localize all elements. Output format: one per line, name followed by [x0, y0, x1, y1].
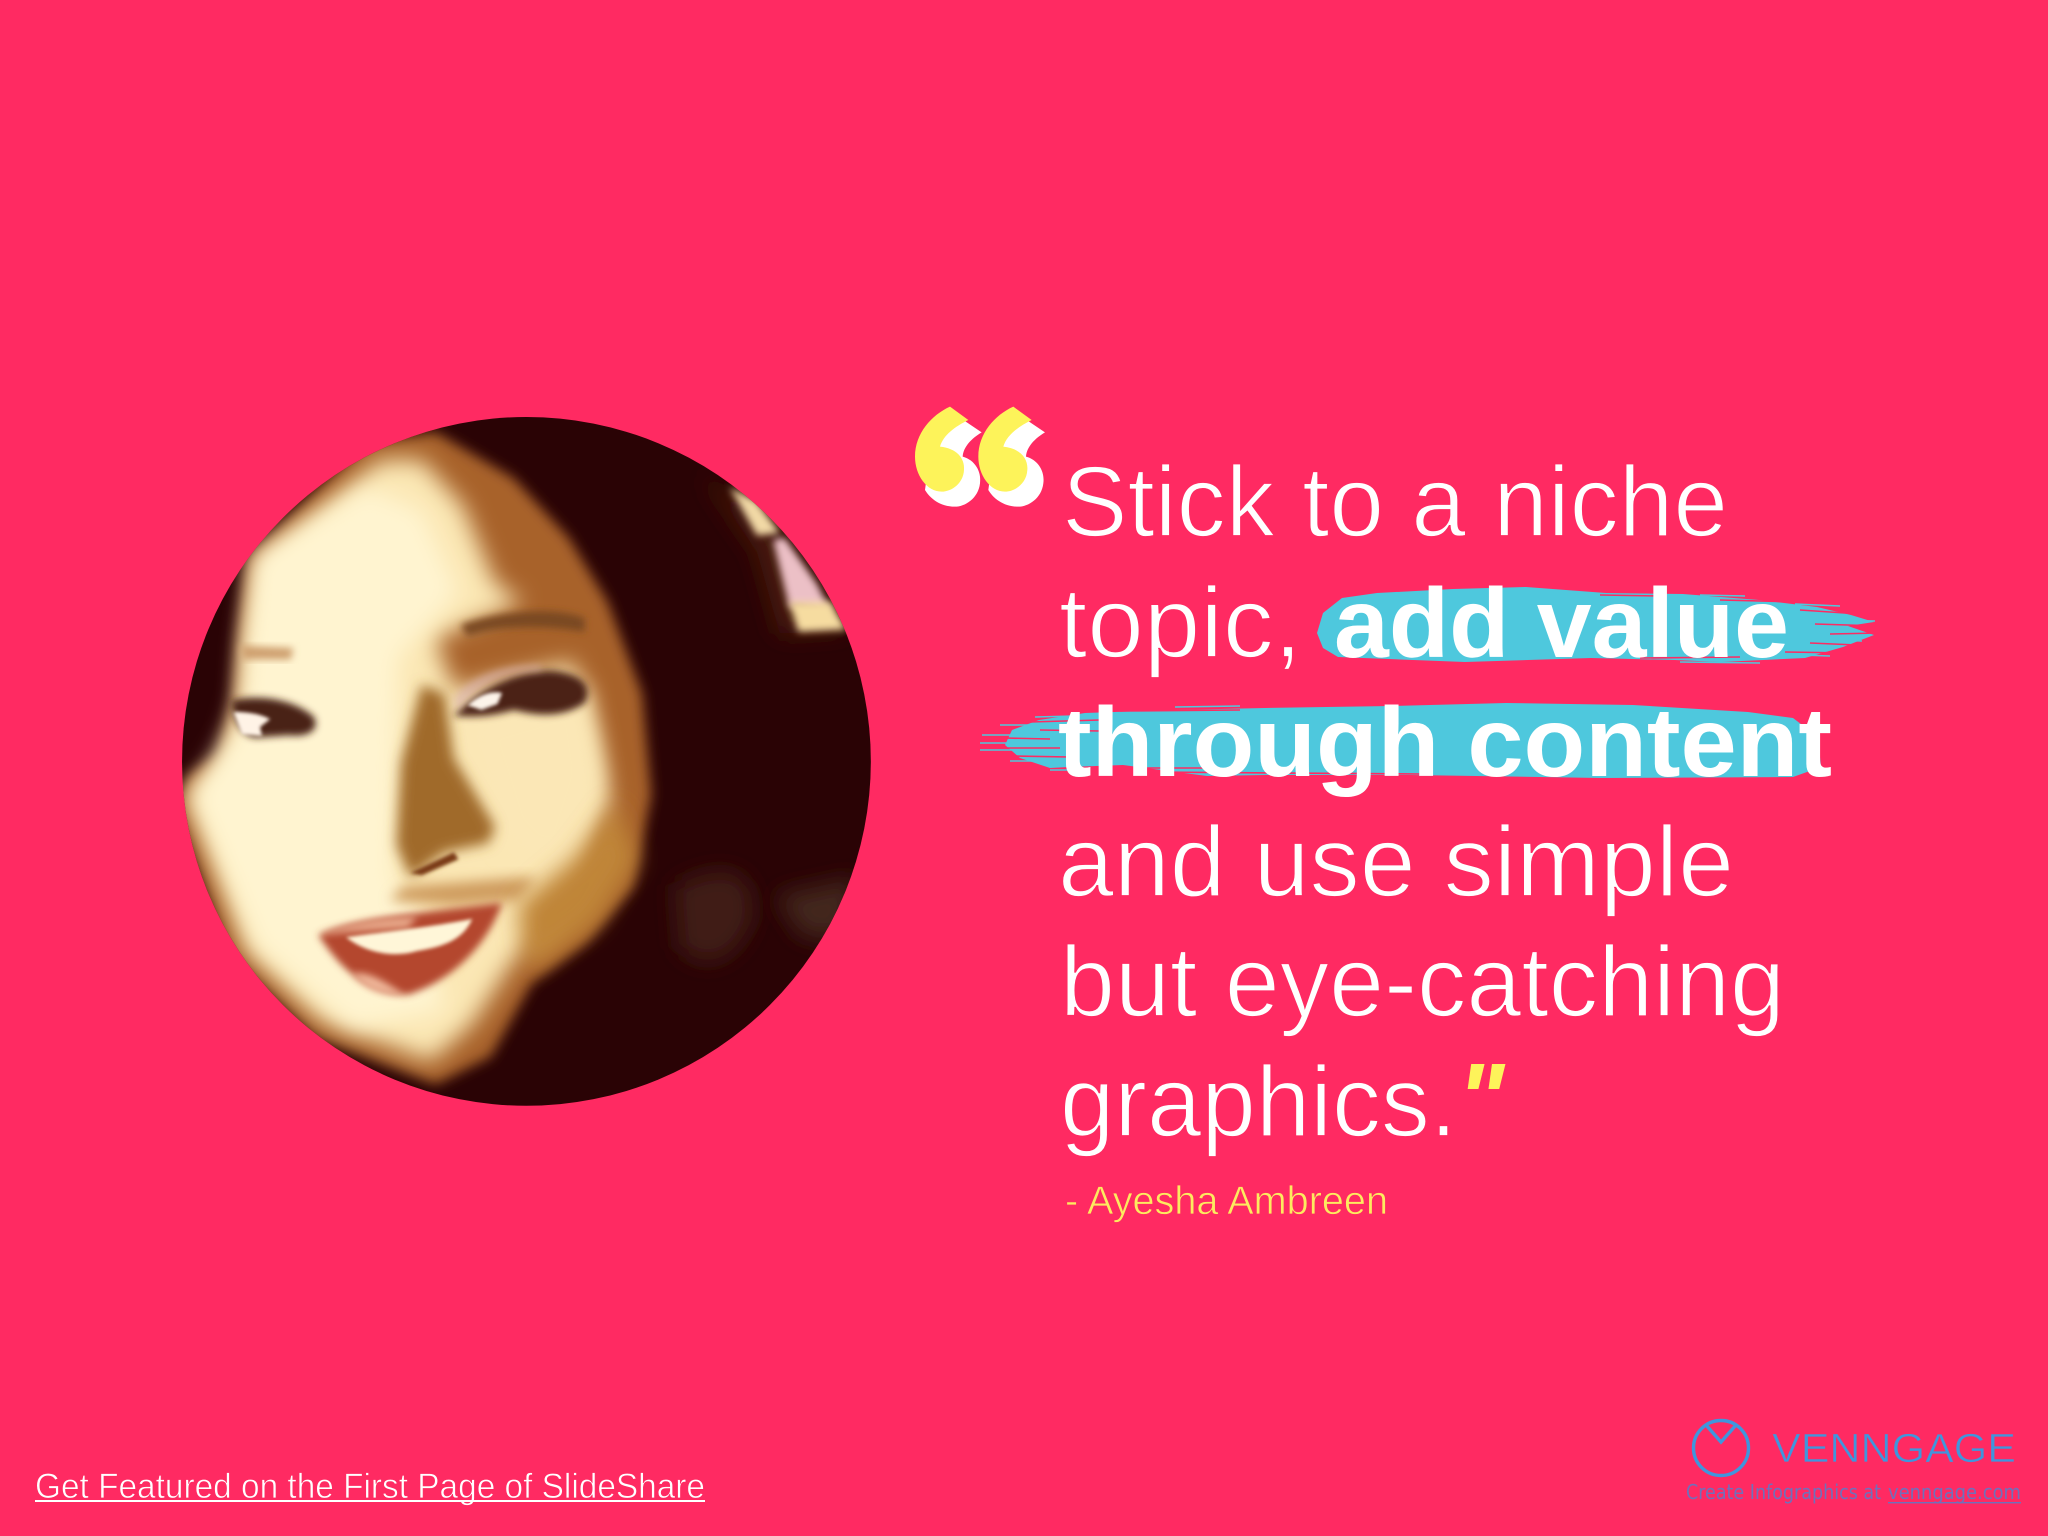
quote line 6: graphics.: [1060, 1046, 1457, 1158]
quote line 3 highlighted: through content: [1058, 687, 1832, 797]
quote line 5: but eye-catching: [1060, 926, 1785, 1038]
opening quotation mark icon: [915, 407, 1045, 507]
icon: venngage mark: [1694, 1420, 1748, 1476]
portrait photo circle: [182, 417, 871, 1106]
quote line 4: and use simple: [1058, 806, 1734, 918]
quote line 2 highlighted: add value: [1334, 568, 1789, 678]
venngage tagline: venngage.com: [1888, 1480, 2021, 1504]
closing quotation mark: ": [1457, 1043, 1506, 1155]
quote text: [1058, 446, 1832, 1158]
venngage tagline: Create Infographics at: [1686, 1480, 1881, 1504]
venngage wordmark: VENNGAGE: [1772, 1425, 2016, 1471]
venngage logo: [1686, 1420, 2021, 1504]
venngage tagline: [1686, 1480, 2021, 1504]
quote line 2 regular: topic,: [1059, 567, 1302, 679]
quote line 1: Stick to a niche: [1062, 446, 1728, 558]
footer link: Get Featured on the First Page of SlideShare: [35, 1467, 705, 1506]
brush highlight: through content: [980, 703, 1821, 778]
attribution: - Ayesha Ambreen: [1065, 1179, 1388, 1223]
brush highlight: add value: [1317, 587, 1880, 663]
